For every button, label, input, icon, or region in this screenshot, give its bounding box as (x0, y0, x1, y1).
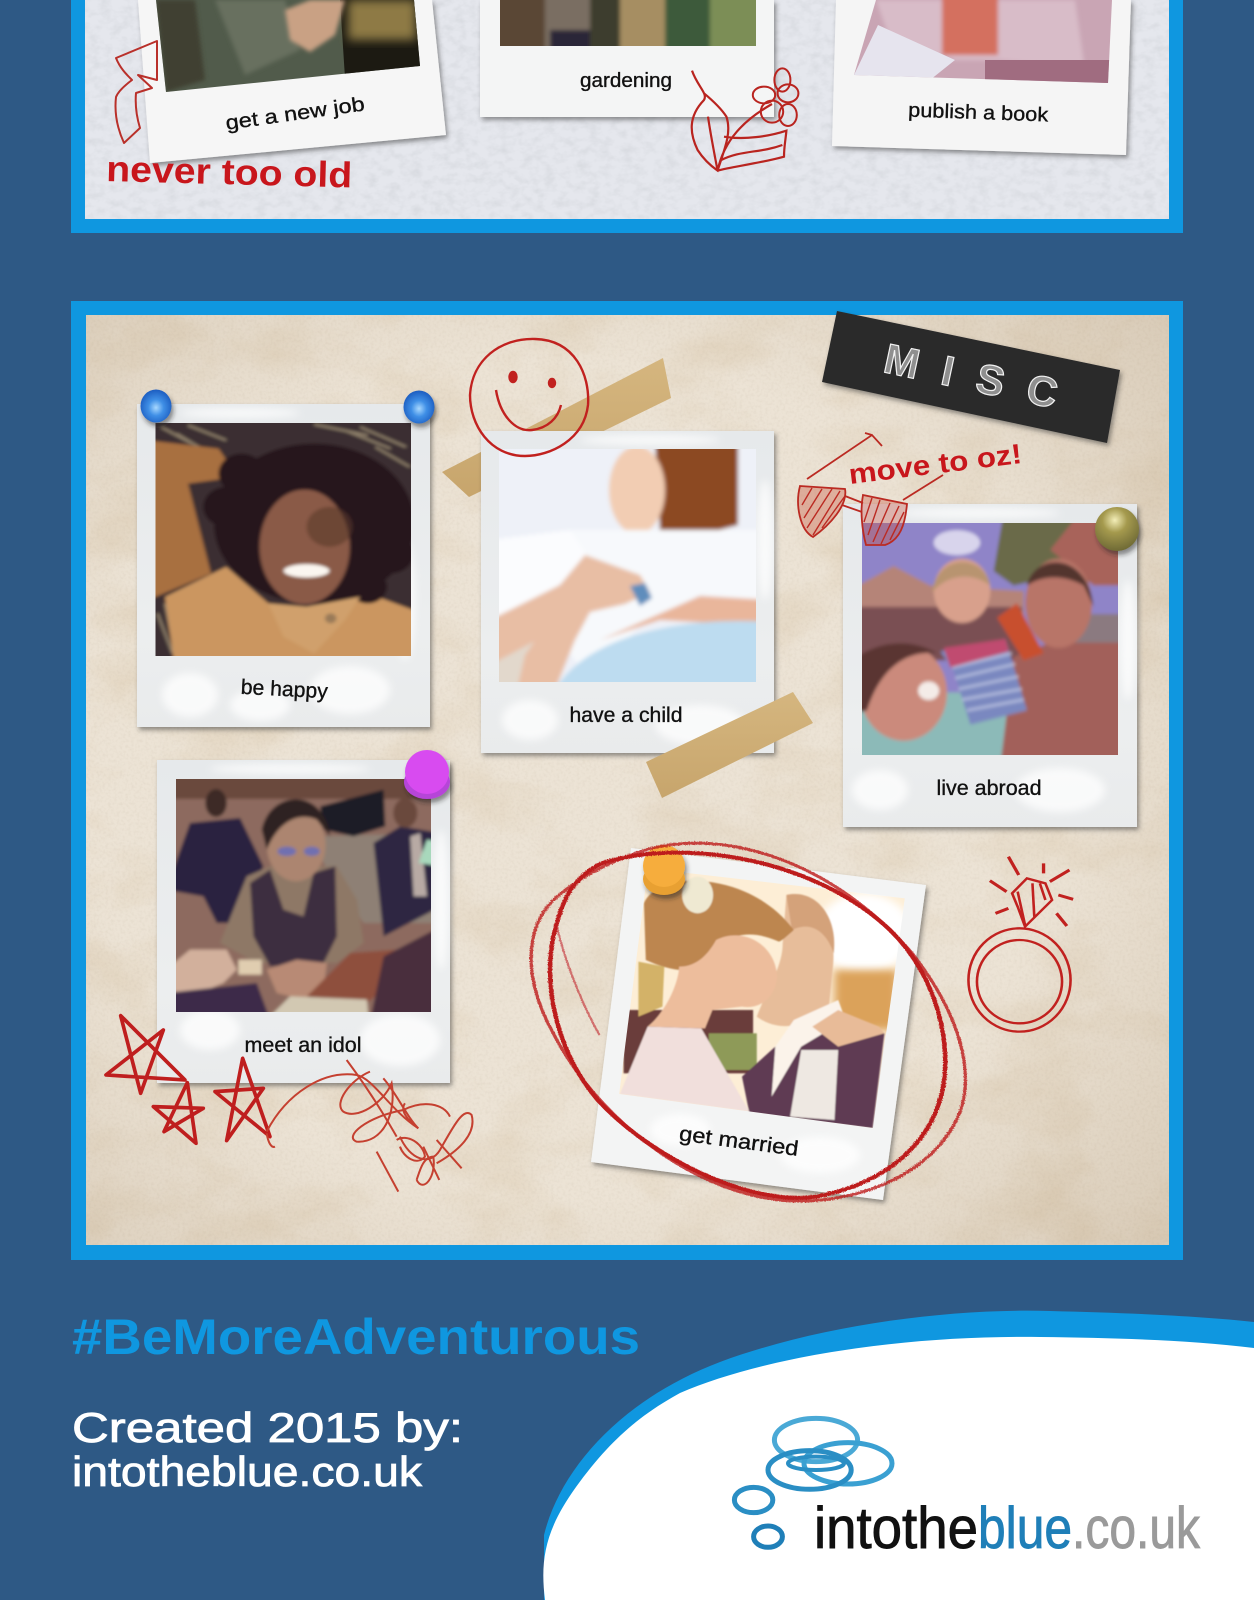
pushpin: pink (404, 750, 450, 799)
panel: never too old board (71, 0, 1183, 233)
doodle: signature scribble (267, 1060, 473, 1192)
doodle: red arrow (115, 41, 157, 143)
panel frame (71, 301, 1183, 1260)
credit text: intotheblue.co.uk (72, 1448, 423, 1495)
photo: pregnancy scan (499, 449, 756, 682)
pushpin: orange (643, 845, 685, 895)
polaroid: gardening (480, 0, 774, 117)
doodle: sunglasses and arrow (798, 433, 943, 545)
caption: be happy (240, 676, 329, 703)
logo swirl icon (734, 1418, 892, 1547)
aged paper background (86, 315, 1169, 1245)
caption: publish a book (908, 100, 1050, 126)
doodle: diamond ring (968, 857, 1073, 1032)
panel frame (71, 0, 1183, 233)
credit text: Created 2015 by: (72, 1404, 463, 1451)
label: MISC (822, 311, 1120, 443)
polaroid frame (157, 760, 450, 1083)
caption: meet an idol (244, 1034, 362, 1057)
polaroid frame (832, 0, 1131, 155)
photo: man in suit (156, 0, 420, 92)
logo wordmark (814, 1496, 1201, 1561)
photo: woman at laptop (854, 0, 1112, 85)
polaroid: meet an idol (157, 760, 450, 1083)
handwritten note: move to oz!: move to oz! (847, 438, 1023, 490)
photo: smiling woman (156, 423, 411, 656)
photo: bride and groom (619, 868, 912, 1128)
doodle: three red stars (106, 1016, 270, 1143)
credit text (72, 1404, 463, 1495)
doodle: red scribbled circle around wedding photo (531, 843, 965, 1201)
photo: garden centre (500, 0, 756, 46)
handwritten note: never too old: never too old (106, 148, 353, 195)
hashtag heading: #BeMoreAdventurous (72, 1309, 640, 1365)
doodle: red flower (692, 68, 798, 171)
polaroid frame (480, 0, 774, 117)
polaroid: publish a book (832, 0, 1131, 155)
polaroid frame (481, 431, 774, 753)
polaroid: get married (591, 848, 926, 1200)
caption: gardening (580, 70, 672, 92)
tape strip lower (646, 692, 813, 798)
pushpin: blue right (404, 390, 434, 424)
photo: family in pool (862, 523, 1118, 755)
polaroid frame (843, 504, 1137, 827)
polaroid frame (591, 848, 926, 1200)
tape strip top (442, 358, 671, 497)
logo wordmark: intothe (814, 1496, 978, 1561)
woven paper background (85, 0, 1169, 219)
polaroid frame (138, 0, 446, 163)
footer white curve with blue edge (543, 1311, 1254, 1600)
pushpin: gold (1095, 507, 1139, 551)
panel: misc board (71, 301, 1183, 1260)
logo wordmark: blue (978, 1496, 1072, 1561)
caption: get a new job (224, 93, 366, 135)
pushpin: blue left (140, 390, 172, 422)
logo: intotheblue.co.uk (734, 1418, 1201, 1561)
caption: live abroad (936, 777, 1042, 800)
polaroid: have a child (481, 431, 774, 753)
label: MISC: MISC (880, 335, 1062, 417)
polaroid: get a new job (138, 0, 446, 163)
logo wordmark: .co.uk (1072, 1496, 1201, 1561)
caption: have a child (570, 704, 682, 727)
photo: celebrity signing autographs (176, 779, 431, 1012)
caption: get married (678, 1122, 800, 1161)
doodle: smiley face (470, 339, 588, 456)
polaroid frame (137, 404, 430, 727)
polaroid: be happy (137, 404, 430, 727)
polaroid: live abroad (843, 504, 1137, 827)
